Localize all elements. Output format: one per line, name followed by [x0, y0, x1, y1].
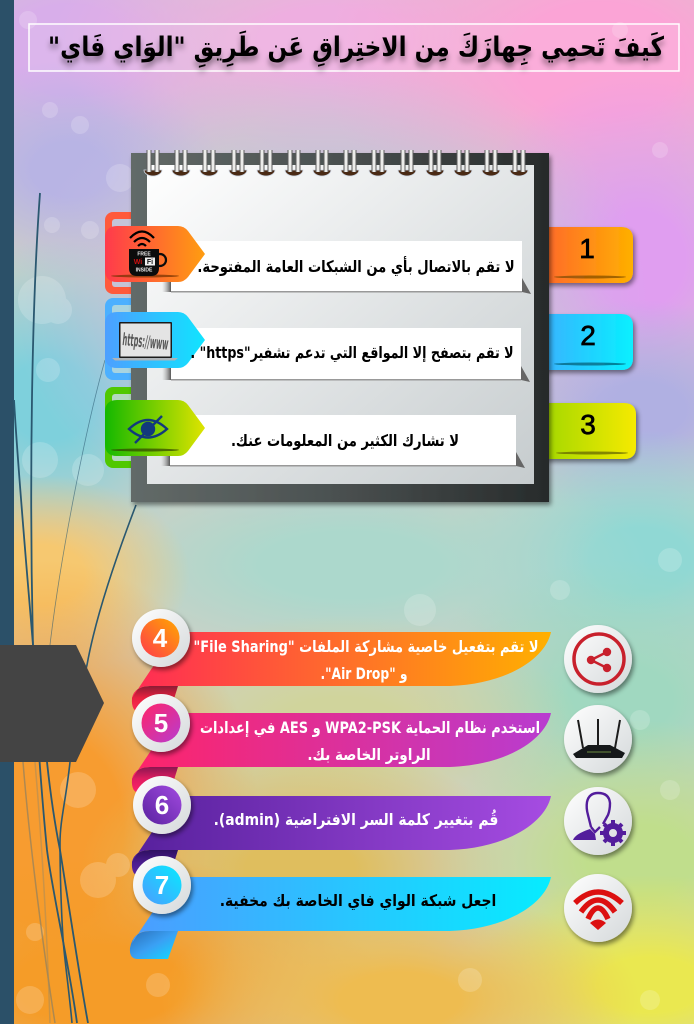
icon: router	[564, 705, 632, 773]
number badge 5: 5	[154, 708, 168, 738]
left sidebar strip	[0, 0, 14, 1024]
ribbon 4	[132, 609, 551, 712]
tag: https laptop: https://www	[121, 330, 169, 355]
panel: spiral notebook	[131, 150, 549, 502]
number tab 1: 1	[579, 233, 595, 264]
icon: wifi	[564, 874, 632, 942]
tag: coffee wifi	[105, 226, 205, 282]
number badge 5	[132, 694, 190, 752]
number tab 1	[545, 227, 633, 283]
icon: coffee cup with wifi: Wi	[134, 259, 142, 266]
number badge 7	[133, 856, 191, 914]
number badge 6	[133, 776, 191, 834]
ribbon 6: قُم بتغيير كلمة السر الافتراضية (admin).	[214, 810, 498, 829]
panel: number tabs	[545, 227, 636, 459]
icon: coffee cup with wifi	[129, 232, 166, 276]
left hexagon arrow	[0, 645, 104, 762]
decorative grass lines	[14, 193, 136, 1023]
icon: coffee cup with wifi: Fi	[147, 259, 153, 266]
number tab 2	[545, 314, 633, 370]
white strip 1	[162, 241, 531, 294]
ribbon 7	[130, 856, 551, 959]
text: tip 2: لا تقم بتصفح إلا المواقع التي تدعم تشفير"https" .	[190, 345, 514, 362]
icon: user with gear	[564, 787, 632, 855]
text: tip 3: لا تشارك الكثير من المعلومات عنك.	[231, 432, 459, 450]
icon: crossed eye	[129, 416, 167, 443]
tab backs behind notebook	[105, 212, 145, 468]
ribbon 4: و "Air Drop".	[320, 666, 408, 683]
spiral rings	[144, 150, 528, 176]
ribbon 7: اجعل شبكة الواي فاي الخاصة بك مخفية.	[220, 891, 496, 911]
icon: share	[564, 625, 632, 693]
ribbon 5	[132, 694, 551, 793]
icon: coffee cup with wifi: INSIDE	[136, 268, 153, 274]
number tab 3: 3	[580, 409, 596, 440]
title	[29, 24, 679, 71]
ribbon 5: استخدم نظام الحماية WPA2-PSK و AES في إعدادات	[200, 719, 540, 737]
title: كَيفَ تَحمِي جِهازَكَ مِن الاختِراقِ عَن طَرِيقِ "الوَاي فَاي"	[48, 30, 664, 68]
tag: eye	[105, 400, 205, 456]
text: tip 1: لا تقم بالاتصال بأي من الشبكات العامة المفتوحة.	[197, 256, 515, 277]
number tab 2: 2	[580, 320, 596, 351]
ribbon 6	[132, 776, 551, 876]
ribbon 5: الراوتر الخاصة بك.	[307, 746, 431, 764]
number badge 6: 6	[155, 790, 169, 820]
white strip 2	[162, 328, 530, 382]
tag: https laptop	[105, 312, 205, 368]
number badge 7: 7	[155, 870, 169, 900]
number tab 3	[545, 403, 636, 459]
number badge 4	[132, 609, 190, 667]
ribbon 4: لا تقم بتفعيل خاصية مشاركة الملفات "File Sharing"	[194, 638, 538, 656]
white strip 3	[161, 415, 525, 468]
number badge 4: 4	[153, 623, 168, 653]
icon: coffee cup with wifi: FREE	[137, 252, 151, 258]
